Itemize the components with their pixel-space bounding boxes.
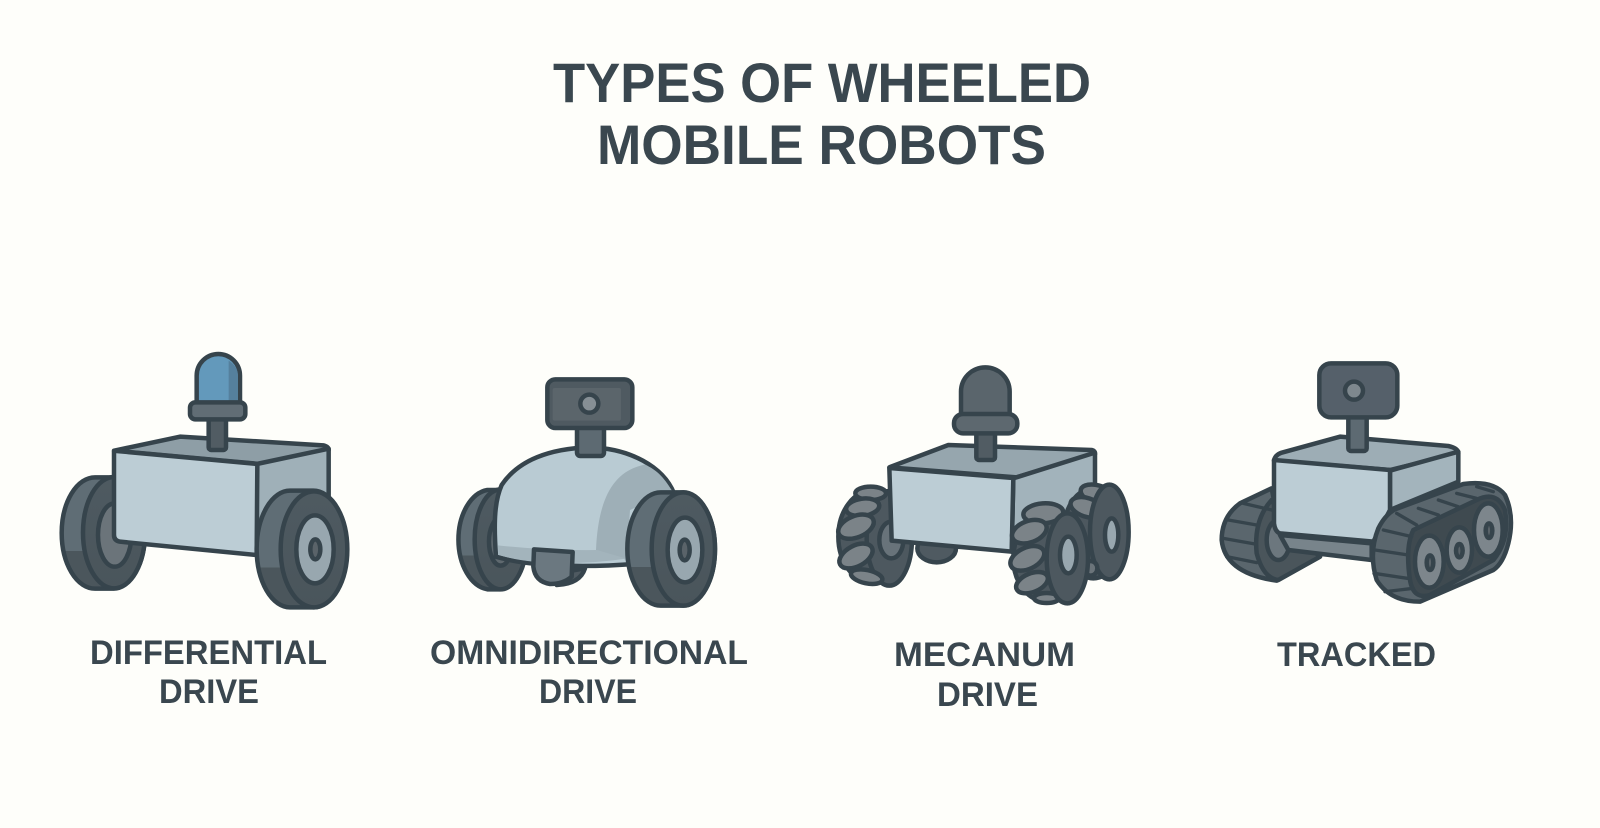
caster wheel <box>533 549 585 585</box>
body box <box>114 437 329 555</box>
front track tread lines <box>1374 487 1493 592</box>
label: mecanum drive: MECANUM <box>894 636 1075 674</box>
body box <box>1274 437 1458 542</box>
label: tracked: TRACKED <box>1277 636 1436 674</box>
title <box>553 51 1091 176</box>
label: omnidirectional drive <box>430 634 748 711</box>
camera <box>1319 363 1397 451</box>
rear track <box>1222 488 1320 581</box>
caster <box>917 534 956 562</box>
back wheel <box>62 477 145 589</box>
label: differential drive <box>90 634 327 711</box>
beacon <box>190 354 245 450</box>
rear track tread lines <box>1223 503 1272 563</box>
body box <box>889 445 1095 552</box>
front track <box>1373 483 1511 602</box>
robot: differential drive <box>62 354 347 607</box>
dome body <box>495 447 675 566</box>
underbelly <box>1280 535 1372 560</box>
title: MOBILE ROBOTS <box>597 113 1046 176</box>
camera <box>547 379 632 456</box>
back wheel <box>458 489 527 589</box>
rear right mecanum wheel <box>1063 480 1129 579</box>
robot: mecanum drive <box>835 367 1129 603</box>
track wheels <box>1415 503 1503 588</box>
front right mecanum wheel <box>1007 502 1088 603</box>
dome shading <box>596 465 672 560</box>
front wheel <box>627 492 715 606</box>
front wheel <box>257 491 347 607</box>
title: TYPES OF WHEELED <box>553 51 1091 114</box>
label: mecanum drive <box>894 636 1075 714</box>
robot: tracked <box>1222 363 1511 602</box>
rear left mecanum wheel <box>835 487 912 587</box>
robot: omnidirectional drive <box>458 379 715 606</box>
label: omnidirectional drive: DRIVE <box>539 673 637 711</box>
label: omnidirectional drive: OMNIDIRECTIONAL <box>430 634 748 672</box>
label: differential drive: DIFFERENTIAL <box>90 634 327 672</box>
beacon <box>954 367 1017 460</box>
label: mecanum drive: DRIVE <box>937 676 1038 714</box>
label: differential drive: DRIVE <box>159 673 259 711</box>
